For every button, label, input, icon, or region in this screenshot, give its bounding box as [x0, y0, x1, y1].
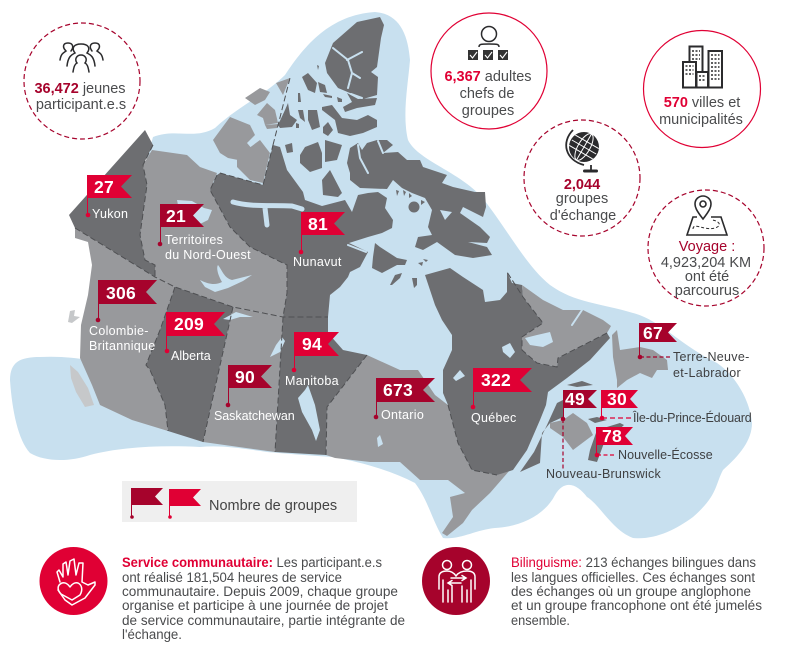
service communautaire: Service communautaire: Les participant.e.s [122, 555, 382, 570]
bilinguisme: des échanges où un groupe anglophone [511, 584, 751, 599]
Baffin Island [347, 140, 492, 258]
Labrador [522, 285, 611, 367]
stat: groupes d'échange [524, 120, 640, 236]
flag: Saskatchewan 90: 90 [235, 367, 255, 387]
flag: Saskatchewan 90: Saskatchewan [214, 409, 295, 423]
legend [122, 481, 357, 522]
province: Québec [425, 268, 610, 475]
province: Territoires du Nord-Ouest [140, 150, 287, 317]
New Brunswick [550, 413, 593, 450]
flag: Nouvelle-Écosse 78: 78 [602, 426, 622, 446]
Arctic islands, dark [278, 17, 384, 197]
stat: adultes chefs de groupes: chefs de [460, 86, 514, 102]
flag: Nunavut 81: Nunavut [293, 255, 342, 269]
flag: Colombie-Britannique 306: 306 [106, 283, 136, 303]
province: Colombie-Britannique [75, 228, 175, 431]
territorial borders [75, 78, 607, 475]
flag: Québec 322: 322 [481, 370, 511, 390]
flag: Nouveau-Brunswick 49: Nouveau-Brunswick [546, 467, 661, 481]
icon: group of people [60, 43, 103, 72]
flag: Ontario 673: 673 [383, 380, 413, 400]
bilinguisme: les langues officielles. Ces échanges sont [511, 570, 755, 585]
flag: Nouveau-Brunswick 49: 49 [565, 389, 585, 409]
flag: Territoires du Nord-Ouest 21 [158, 204, 251, 262]
flag: Alberta 209: Alberta [171, 349, 211, 363]
flag: Nouveau-Brunswick 49 [546, 389, 661, 481]
stat: groupes d'échange: d'échange [550, 208, 616, 224]
service communautaire [40, 547, 405, 642]
stat: villes et municipalités [644, 30, 760, 148]
service communautaire: ont réalisé 181,504 heures de service [122, 570, 342, 585]
flag: Territoires du Nord-Ouest 21: du Nord-Ouest [165, 248, 251, 262]
bilinguisme: et un groupe francophone ont été jumelés [511, 598, 762, 613]
province: Ontario [326, 355, 510, 536]
stat: voyage: ont été [685, 269, 729, 285]
stat: adultes chefs de groupes [431, 13, 547, 129]
bilinguisme [422, 547, 762, 628]
Nova Scotia, PEI and Anticosti [567, 381, 624, 462]
Newfoundland [612, 330, 668, 388]
service communautaire: de service communautaire, partie intégrante de [122, 613, 405, 628]
bilinguisme: ensemble. [511, 613, 570, 628]
flag: Colombie-Britannique 306 [89, 280, 157, 353]
flag: Ontario 673 [374, 378, 435, 422]
service communautaire: organise et participe à une journée de projet [122, 598, 388, 613]
flag: Terre-Neuve-et-Labrador 67: et-Labrador [673, 366, 741, 380]
flag: Manitoba 94: Manitoba [285, 374, 339, 388]
flag: Territoires du Nord-Ouest 21: Territoires [165, 233, 223, 247]
flag: Terre-Neuve-et-Labrador 67 [638, 323, 750, 380]
stat: jeunes participants: participant.e.s [36, 97, 126, 113]
flag: Terre-Neuve-et-Labrador 67: 67 [643, 323, 663, 343]
flag: Yukon 27: Yukon [92, 207, 128, 221]
Vancouver Island [70, 365, 94, 407]
stat: voyage: Voyage : [679, 239, 735, 255]
stat: villes et municipalités: municipalités [659, 112, 743, 128]
stat: jeunes participants [24, 23, 140, 139]
province: Alberta [146, 287, 233, 442]
Gaspé peninsula [520, 400, 563, 472]
flag: Nouvelle-Écosse 78 [595, 426, 713, 462]
icon: hand with heart [57, 559, 95, 605]
flag: Manitoba 94: 94 [302, 334, 322, 354]
flag: Nunavut 81 [293, 212, 345, 269]
Southampton and small Hudson Bay islands [372, 243, 428, 288]
service communautaire: l'échange. [122, 627, 182, 642]
flag: Ontario 673: Ontario [381, 408, 424, 422]
stat: adultes chefs de groupes: 6,367 adultes [444, 69, 532, 85]
stat: groupes d'échange: groupes [556, 191, 608, 207]
province: Saskatchewan [203, 307, 283, 452]
flag: Alberta 209 [165, 312, 225, 363]
Arctic islands, medium [213, 78, 290, 183]
icon: globe [564, 127, 604, 172]
flag: Territoires du Nord-Ouest 21: 21 [166, 206, 186, 226]
flag: Nunavut 81: 81 [308, 214, 328, 234]
flag: Nouvelle-Écosse 78: Nouvelle-Écosse [618, 447, 713, 462]
bilinguisme: Bilinguisme: 213 échanges bilingues dans [511, 555, 756, 570]
icon: two people exchanging [439, 560, 475, 602]
icon: map with pin [687, 196, 727, 235]
stat: voyage: 4,923,204 KM [661, 255, 751, 271]
water background [10, 12, 752, 538]
flag: Terre-Neuve-et-Labrador 67: Terre-Neuve- [673, 350, 750, 364]
flag: Québec 322 [471, 368, 532, 425]
legend: Nombre de groupes [209, 498, 337, 514]
flag: Québec 322: Québec [471, 411, 517, 425]
flag: Île-du-Prince-Édouard 30 [600, 389, 752, 425]
flag: Île-du-Prince-Édouard 30: Île-du-Prince-Édouard [632, 410, 752, 425]
stat: groupes d'échange: 2,044 [564, 177, 600, 193]
icon: leader with checkboxes [468, 26, 508, 60]
flag: Yukon 27 [86, 175, 132, 221]
province: Yukon [69, 130, 155, 277]
flag: Saskatchewan 90 [214, 365, 295, 423]
province: Manitoba and Nunavut mainland [210, 145, 393, 455]
inland waters [177, 48, 582, 447]
Haida Gwaii [68, 310, 80, 323]
stat: adultes chefs de groupes: groupes [462, 103, 514, 119]
service communautaire: communautaire. Depuis 2009, chaque groupe [122, 584, 398, 599]
flag: Colombie-Britannique 306: Colombie- [89, 324, 149, 338]
flag: Colombie-Britannique 306: Britannique [89, 339, 156, 353]
flag: Yukon 27: 27 [94, 177, 114, 197]
stat: voyage: parcourus [675, 283, 739, 299]
flag: Manitoba 94 [285, 332, 339, 388]
flag: Île-du-Prince-Édouard 30: 30 [607, 389, 627, 409]
stat: voyage [648, 190, 764, 306]
icon: city buildings [683, 46, 722, 88]
stat: jeunes participants: 36,472 jeunes [34, 81, 126, 97]
flag: Alberta 209: 209 [174, 314, 204, 334]
stat: villes et municipalités: 570 villes et [664, 95, 740, 111]
